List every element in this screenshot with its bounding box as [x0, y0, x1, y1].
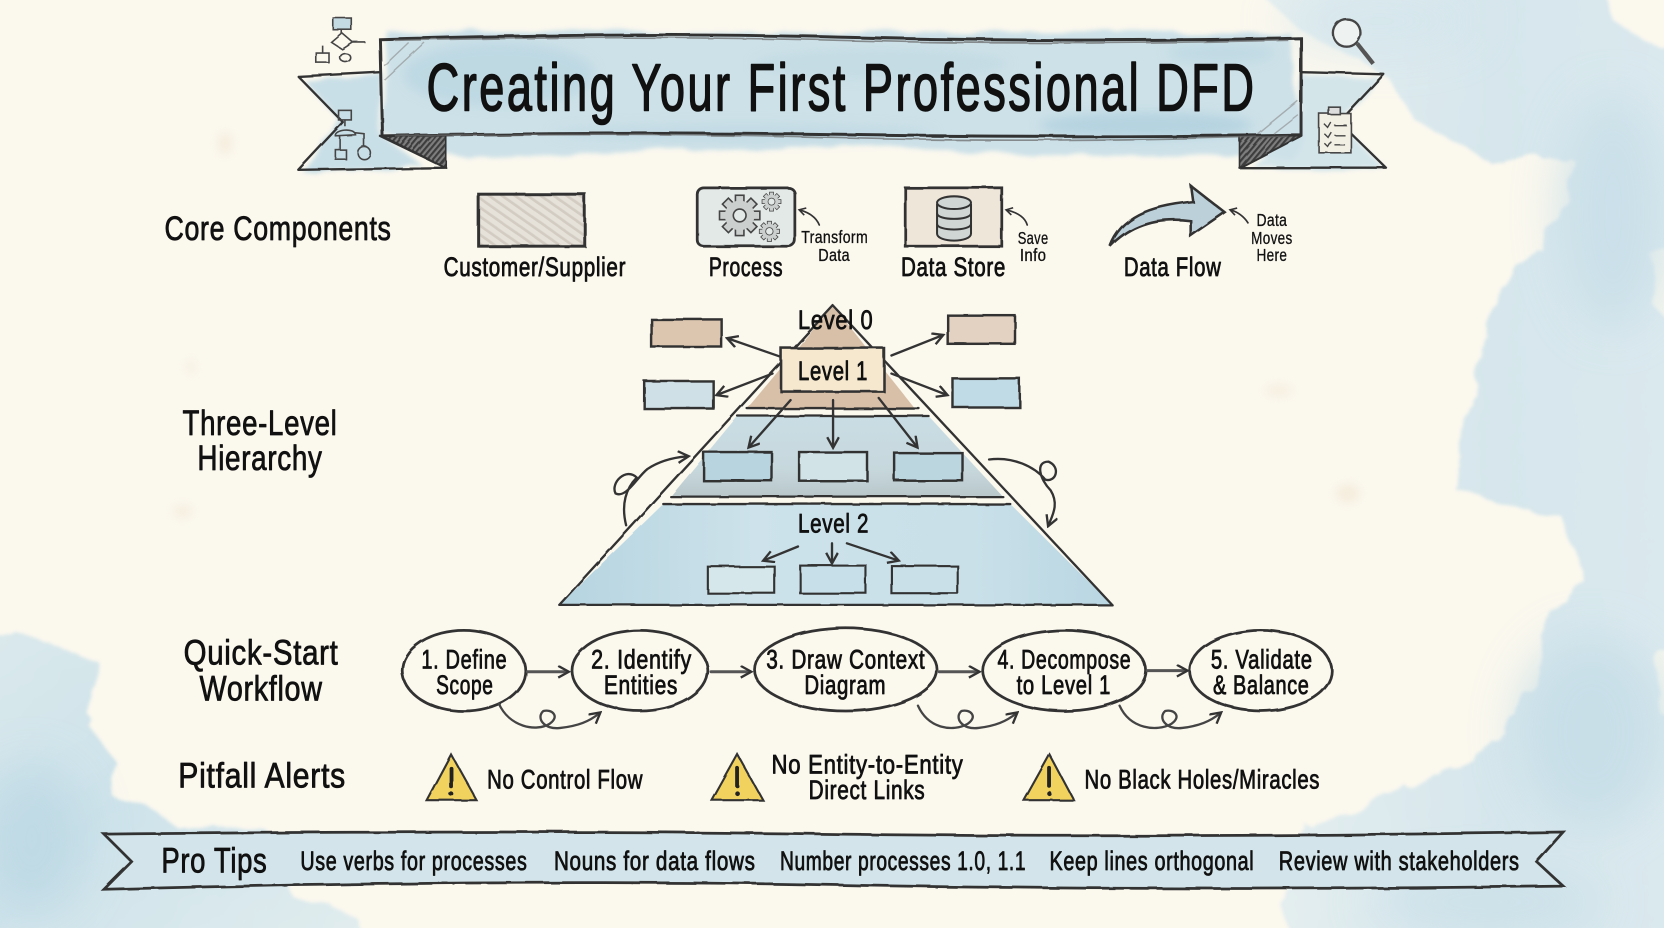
- icon: flowchart top left: [316, 18, 365, 63]
- note: Save Info: [1007, 210, 1048, 265]
- tip list: Keep lines orthogonal: [1050, 846, 1254, 876]
- level 1 child boxes: [704, 452, 963, 481]
- note: Data Moves Here: Moves: [1251, 228, 1293, 248]
- title banner: [298, 32, 1386, 172]
- step 3: Diagram: [804, 670, 886, 700]
- step 4: to Level 1: [1017, 670, 1111, 700]
- Level 0 label: Level 0: [798, 305, 873, 335]
- tip list: Nouns for data flows: [554, 846, 756, 876]
- section label: Pitfall Alerts: Pitfall Alerts: [178, 756, 346, 795]
- icon: magnifier: [1333, 19, 1373, 64]
- pitfall: No Black Holes/Miracles: No Black Holes/Miracles: [1085, 764, 1320, 794]
- section label: Quick-Start Workflow: Quick-Start: [184, 633, 339, 672]
- tip list: Use verbs for processes: [300, 846, 527, 876]
- step 4: 4. Decompose: [998, 645, 1131, 675]
- left feedback loop arrow: [614, 456, 688, 525]
- step 2: [572, 630, 708, 711]
- icon: warning triangle: [427, 754, 477, 800]
- ribbon shape: [104, 832, 1563, 889]
- right feedback loop arrow: [989, 459, 1056, 525]
- component: Process: Process: [709, 252, 783, 282]
- note: Save Info: Info: [1020, 245, 1046, 265]
- pitfall: No Entity-to-Entity Direct Links: [712, 750, 964, 805]
- component: Data Store: Data Store: [901, 252, 1006, 282]
- pitfall: No Black Holes/Miracles: [1024, 754, 1320, 800]
- pitfall: No Entity-to-Entity Direct Links: No Entity-to-Entity: [772, 750, 964, 780]
- tip list: Number processes 1.0, 1.1: [780, 846, 1026, 876]
- section label: Three-Level Hierarchy: Three-Level: [183, 404, 337, 443]
- step 1: Scope: [436, 670, 493, 700]
- ribbon tails: [298, 72, 1386, 170]
- banner watercolor wash: [301, 32, 1384, 172]
- section label: Three-Level Hierarchy: [183, 404, 337, 478]
- icon: clipboard: [1319, 107, 1351, 153]
- step 5: [1190, 630, 1332, 711]
- step 1: 1. Define: [421, 645, 507, 675]
- Level 1 box: Level 1: [798, 356, 868, 386]
- pitfall: No Control Flow: No Control Flow: [487, 764, 643, 794]
- step arrows: [527, 671, 1186, 672]
- note: Data Moves Here: Here: [1256, 245, 1287, 265]
- icon: database cylinder: [937, 196, 971, 241]
- note: Transform Data: [800, 210, 868, 265]
- Level 2 label: Level 2: [798, 509, 869, 539]
- level 2 child boxes: [708, 566, 957, 593]
- icon: warning triangle: [1024, 754, 1074, 800]
- step 3: [755, 628, 937, 711]
- component: Data Store: [901, 188, 1048, 282]
- component: Data Flow: [1110, 186, 1293, 282]
- note: Data Moves Here: Data: [1256, 210, 1287, 230]
- loop-back arrows: [499, 704, 1220, 728]
- section label: Three-Level Hierarchy: Hierarchy: [197, 439, 323, 478]
- icon: gears: [720, 192, 781, 241]
- workflow steps: [402, 628, 1332, 728]
- icon: curved arrow: [1110, 186, 1225, 246]
- component: Customer/Supplier entity: Customer/Supplier: [444, 252, 626, 282]
- section label: Core Components: Core Components: [165, 210, 392, 248]
- note: Transform Data: Data: [818, 245, 850, 265]
- side boxes: [644, 315, 1020, 409]
- step 1: [402, 630, 525, 711]
- paper stains: [173, 133, 1359, 517]
- step 5: 5. Validate: [1211, 645, 1313, 675]
- step 4: [983, 630, 1146, 711]
- icon: warning triangle: [712, 754, 763, 800]
- pyramid diagram: [559, 305, 1112, 605]
- pro tips banner: [104, 832, 1563, 889]
- component: Process: [697, 188, 868, 282]
- step 5: & Balance: [1213, 670, 1310, 700]
- Level 1 box: [781, 348, 884, 392]
- section label: Quick-Start Workflow: Workflow: [200, 669, 323, 708]
- note: Save Info: Save: [1018, 228, 1048, 248]
- step 3: 3. Draw Context: [766, 645, 925, 675]
- component: Customer/Supplier entity: [444, 194, 626, 282]
- pitfall: No Control Flow: [427, 754, 643, 800]
- step 2: 2. Identify: [591, 645, 692, 675]
- Pro Tips label: Pro Tips: [161, 841, 267, 880]
- pitfall: No Entity-to-Entity Direct Links: Direct Links: [809, 775, 925, 805]
- section label: Quick-Start Workflow: [184, 633, 339, 708]
- cream corner and edge gaps: [1603, 0, 1664, 53]
- tip list: Review with stakeholders: [1279, 846, 1520, 876]
- note: Transform Data: Transform: [801, 227, 868, 247]
- note: Data Moves Here: [1231, 210, 1293, 265]
- icon: flowchart on left tail: [335, 110, 370, 159]
- step 2: Entities: [604, 670, 678, 700]
- title text: Creating Your First Professional DFD: [427, 50, 1256, 125]
- tip list: [300, 846, 1520, 876]
- pyramid tier fills: [559, 306, 1112, 605]
- hierarchy arrows: [717, 335, 947, 562]
- component: Data Flow: Data Flow: [1124, 252, 1221, 282]
- ribbon main outline: [380, 35, 1301, 140]
